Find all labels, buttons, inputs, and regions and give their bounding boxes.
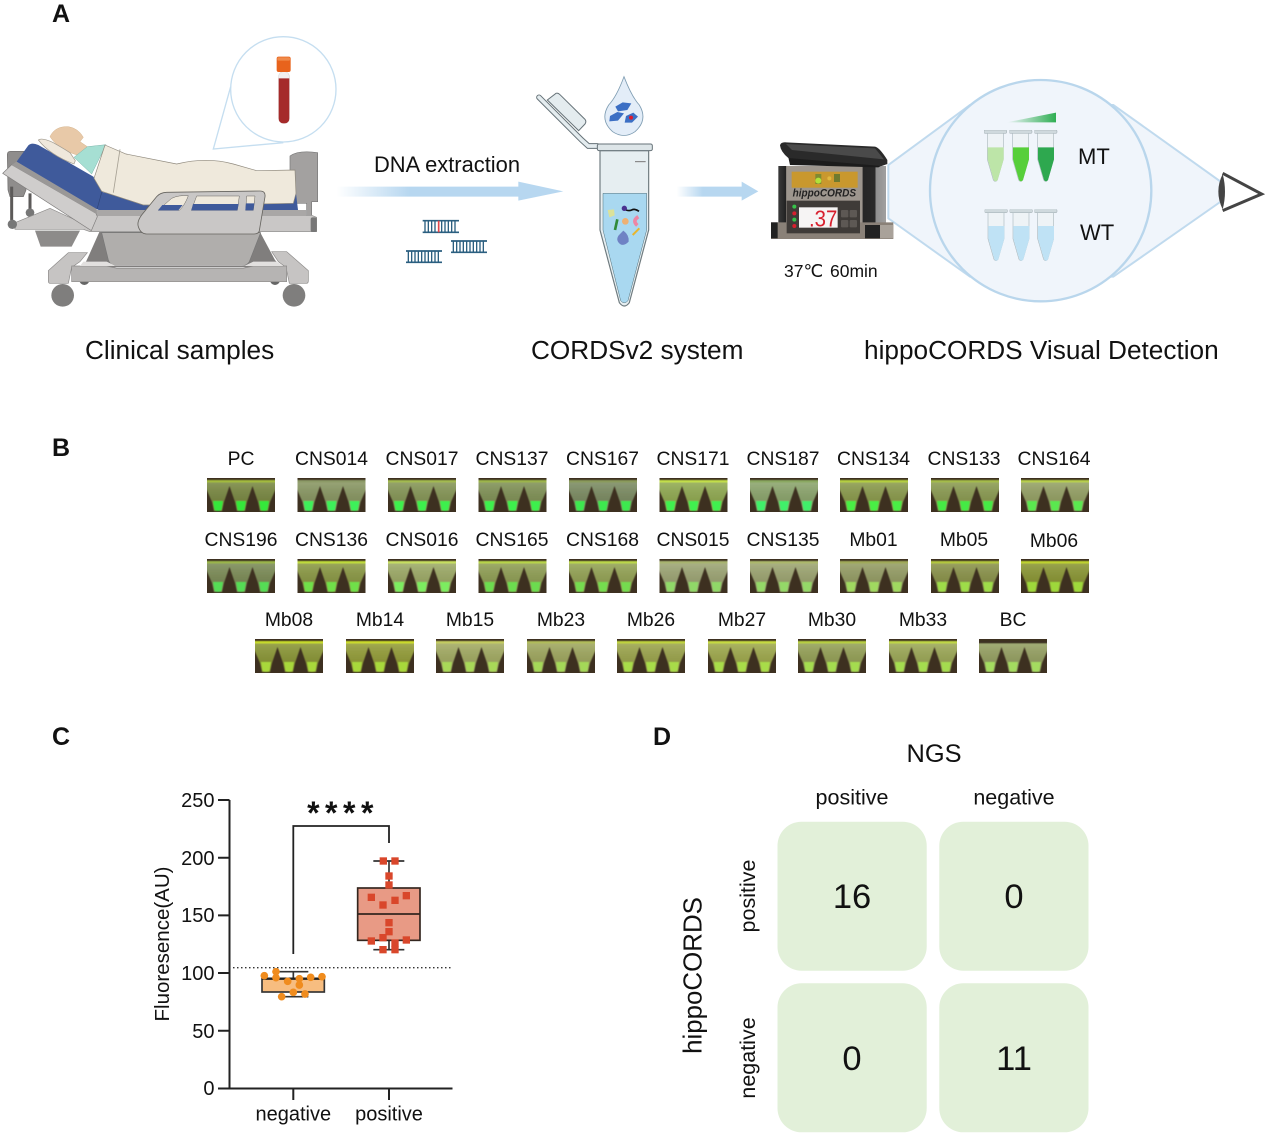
box: positive group <box>358 857 420 953</box>
cell false negative <box>778 983 927 1132</box>
mattress <box>17 144 298 210</box>
sample CNS014 <box>295 449 368 512</box>
sample CNS171 <box>657 449 730 512</box>
eye icon <box>1218 173 1262 211</box>
wheel left <box>51 284 74 307</box>
DNA fragment with mutation <box>423 221 459 232</box>
sample Mb30: Mb30 <box>808 610 856 631</box>
y tick labels: 200 <box>181 848 214 870</box>
sample CNS196: CNS196 <box>205 530 277 551</box>
significance bracket <box>293 826 389 954</box>
sample Mb23: Mb23 <box>537 610 585 631</box>
box: negative group <box>260 968 326 1000</box>
row axis title: hippoCORDS <box>680 897 708 1054</box>
lift column <box>83 232 282 267</box>
step caption: CORDSv2 system: CORDSv2 system <box>531 335 743 365</box>
sample CNS017: CNS017 <box>386 449 458 470</box>
sample Mb08 <box>253 610 325 673</box>
sample Mb15: Mb15 <box>446 610 494 631</box>
callout magnifier <box>213 37 336 149</box>
DNA fragment 2 <box>451 241 487 252</box>
axes and ticks <box>218 800 452 1100</box>
panel label B: B <box>52 434 70 462</box>
sample Mb30 <box>796 610 868 673</box>
bed footboard <box>290 152 318 227</box>
reagent molecules <box>608 206 639 245</box>
sample CNS135 <box>747 530 820 593</box>
bed headboard <box>7 151 27 197</box>
sample CNS015: CNS015 <box>657 530 729 551</box>
y tick labels: 0 <box>203 1078 214 1100</box>
sample CNS196 <box>205 530 277 593</box>
panel B row 2: tube photos <box>205 530 1091 593</box>
x tick labels: positive <box>355 1104 423 1126</box>
magnifier circle <box>930 80 1151 301</box>
incubator device: .37 <box>809 206 837 232</box>
sample CNS165: CNS165 <box>476 530 548 551</box>
sample PC <box>205 449 277 512</box>
DNA fragment 3 <box>406 251 442 262</box>
magnification cone <box>888 105 1221 277</box>
sample Mb26: Mb26 <box>627 610 675 631</box>
process label: DNA extraction: DNA extraction <box>374 152 520 177</box>
step caption: hippoCORDS visual detection: hippoCORDS Visual Detection <box>864 335 1219 365</box>
sample CNS015 <box>657 530 730 593</box>
sample PC: PC <box>228 449 254 470</box>
liquid <box>603 193 647 303</box>
cell true positive: 16 <box>833 878 871 916</box>
side rail <box>138 191 265 234</box>
column axis title: NGS <box>906 740 962 768</box>
sample Mb27: Mb27 <box>718 610 766 631</box>
cell false positive <box>939 822 1088 971</box>
small rear wheels <box>79 275 89 285</box>
row label negative: negative <box>736 1017 760 1099</box>
data points positive <box>368 857 410 953</box>
sample CNS134 <box>837 449 910 512</box>
sample Mb33: Mb33 <box>899 610 947 631</box>
confusion matrix: hippoCORDS vs NGS <box>680 740 1088 1132</box>
sample Mb27 <box>706 610 778 673</box>
sample CNS017 <box>386 449 458 512</box>
sample CNS187 <box>747 449 820 512</box>
patient head <box>50 127 87 156</box>
sample CNS168: CNS168 <box>566 530 639 551</box>
significance stars: **** <box>307 795 379 831</box>
sample CNS187: CNS187 <box>747 449 819 470</box>
incubator device <box>771 142 893 239</box>
sample Mb01: Mb01 <box>849 530 898 551</box>
sample CNS133 <box>928 449 1001 512</box>
cell true negative <box>939 983 1088 1132</box>
sample CNS137 <box>476 449 548 512</box>
illustration: DNA extraction and CORDS tube <box>337 77 758 306</box>
illustration: patient in hospital bed <box>3 37 336 307</box>
data points negative <box>260 968 326 1000</box>
base bar <box>72 266 287 282</box>
panel label C: C <box>52 723 70 751</box>
cell true negative: 11 <box>996 1040 1032 1078</box>
WT tubes <box>985 209 1057 261</box>
sample Mb05 <box>929 530 1001 593</box>
sample BC: BC <box>1000 610 1026 631</box>
y tick labels: 50 <box>192 1021 214 1043</box>
step caption: clinical samples: Clinical samples <box>85 335 274 365</box>
sample Mb08: Mb08 <box>265 610 313 631</box>
x tick labels: negative <box>255 1104 331 1126</box>
x tick labels <box>255 1104 423 1126</box>
sample CNS136 <box>295 530 368 593</box>
y tick labels <box>181 790 214 1100</box>
cell true positive <box>778 822 927 971</box>
panel label D: D <box>653 723 671 751</box>
reaction tube <box>597 144 652 306</box>
y tick labels: 150 <box>181 905 214 927</box>
sample Mb05: Mb05 <box>940 530 988 551</box>
sample CNS016: CNS016 <box>386 530 458 551</box>
sample droplet <box>605 77 643 135</box>
sample CNS133: CNS133 <box>928 449 1000 470</box>
sample BC <box>977 610 1049 673</box>
sample CNS167 <box>566 449 639 512</box>
sample Mb14: Mb14 <box>356 610 404 631</box>
wheel right <box>283 284 305 307</box>
cell false positive: 0 <box>1004 878 1024 916</box>
sample CNS016 <box>386 530 458 593</box>
box plot: fluorescence by group <box>151 790 452 1126</box>
intensity gradient wedge <box>1007 113 1056 122</box>
panel B row 3: tube photos <box>253 610 1049 673</box>
blanket <box>94 145 296 205</box>
sample Mb06 <box>1019 531 1091 593</box>
panel label A: A <box>52 0 70 28</box>
arrow to tube <box>337 182 563 201</box>
sample Mb15 <box>434 610 506 673</box>
tube lid <box>539 93 597 146</box>
sample CNS167: CNS167 <box>566 449 639 470</box>
hospital gown <box>74 145 106 174</box>
sample Mb14 <box>344 610 416 673</box>
rail windows <box>158 196 188 210</box>
label MT: MT <box>1078 144 1110 169</box>
y tick labels: 250 <box>181 790 214 812</box>
MT tubes <box>984 130 1057 181</box>
bed platform <box>15 208 317 232</box>
sample CNS171: CNS171 <box>657 449 729 470</box>
sample CNS168 <box>566 530 639 593</box>
head section <box>3 165 97 231</box>
sample CNS135: CNS135 <box>747 530 819 551</box>
sample CNS164: CNS164 <box>1018 449 1091 470</box>
base side arms <box>48 253 87 283</box>
column label positive: positive <box>816 786 888 810</box>
sample CNS136: CNS136 <box>295 530 368 551</box>
sample CNS164 <box>1018 449 1091 512</box>
pillow <box>38 139 75 164</box>
sample Mb01 <box>838 530 910 593</box>
incubation conditions: 37℃ <box>784 261 823 281</box>
y axis title: Fluoresence(AU) <box>151 867 174 1021</box>
sample Mb26 <box>615 610 687 673</box>
sample CNS137: CNS137 <box>476 449 548 470</box>
y tick labels: 100 <box>181 963 214 985</box>
incubator device: hippoCORDS <box>793 188 856 200</box>
panel B row 1: tube photos <box>205 449 1091 512</box>
illustration: hippoCORDS incubator and visual readout <box>771 80 1262 301</box>
storage tray <box>35 231 80 247</box>
lift cover <box>102 233 261 266</box>
sample CNS134: CNS134 <box>837 449 910 470</box>
sample Mb06: Mb06 <box>1030 531 1078 552</box>
foot deck stripe <box>96 210 306 216</box>
row label positive: positive <box>736 860 760 932</box>
sample Mb23 <box>525 610 597 673</box>
sample CNS014: CNS014 <box>295 449 368 470</box>
label WT: WT <box>1080 220 1114 245</box>
blood tube <box>277 57 291 123</box>
threshold line <box>233 967 452 969</box>
sample Mb33 <box>887 610 959 673</box>
arrow to incubator <box>677 182 758 201</box>
column label negative: negative <box>973 786 1055 810</box>
incubation conditions: 60min <box>830 261 878 281</box>
sample CNS165 <box>476 530 548 593</box>
cell false negative: 0 <box>842 1040 862 1078</box>
